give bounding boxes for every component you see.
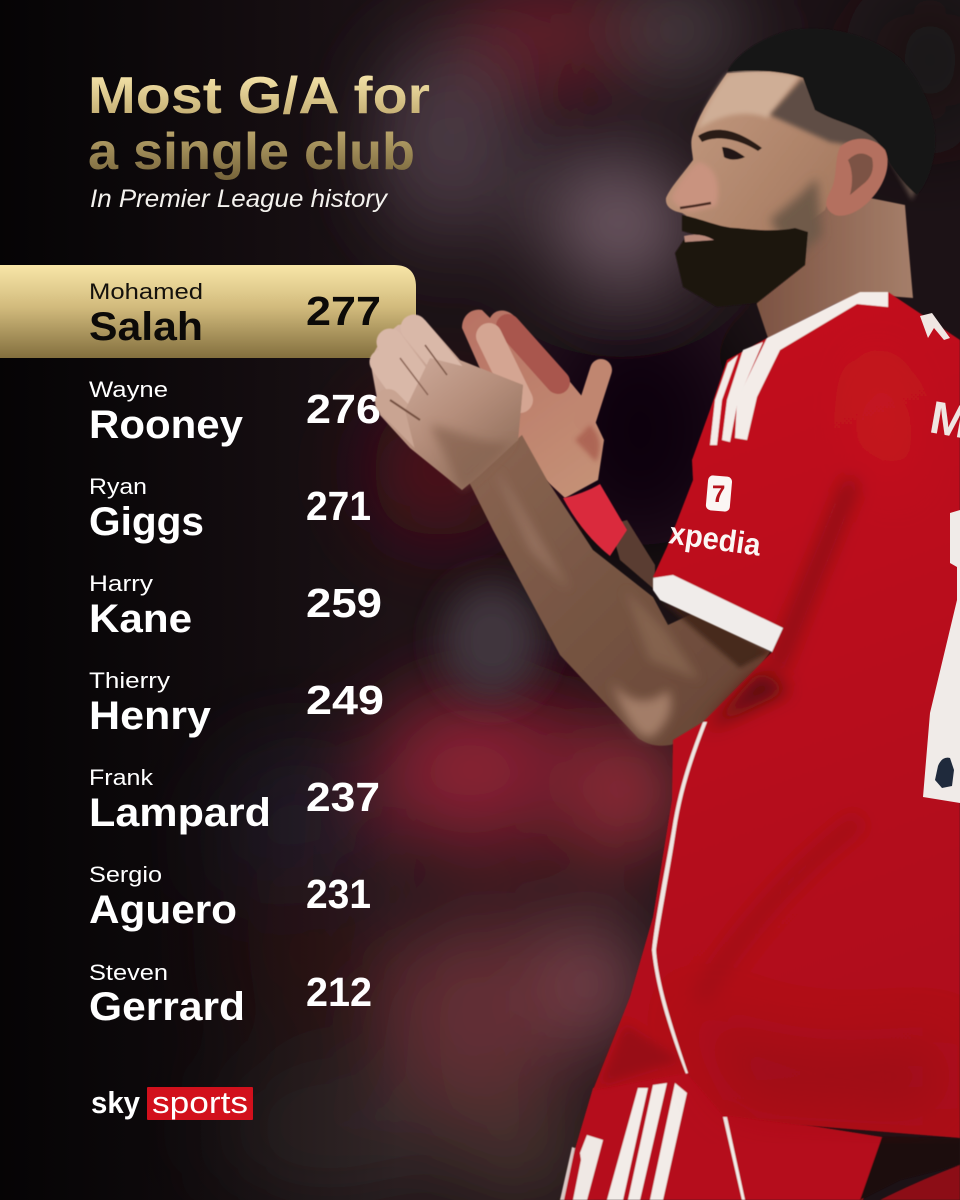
row: Gerrard: Steven [89, 960, 168, 985]
subtitle: In Premier League history [90, 185, 389, 213]
highlighted gold row: Salah: Mohamed [89, 279, 203, 304]
sponsor logo: 7 [712, 481, 725, 508]
row: Gerrard: Gerrard [89, 985, 245, 1029]
row: Giggs: Giggs [89, 500, 204, 544]
row: Lampard: Lampard [89, 791, 271, 835]
neck [750, 190, 913, 338]
near forearm [468, 435, 770, 746]
row: Aguero: 231 [306, 871, 371, 917]
title: Most G/A for [88, 67, 430, 125]
head [666, 28, 935, 307]
wristband [563, 484, 627, 556]
row: Rooney [89, 377, 381, 447]
row: Henry: 249 [306, 677, 384, 723]
row: Kane: Harry [89, 571, 153, 596]
eyebrow [698, 130, 762, 151]
row: Henry: Thierry [89, 668, 170, 693]
row: Lampard [89, 765, 380, 835]
highlighted gold row: Salah [0, 265, 416, 358]
row: Lampard: Frank [89, 765, 154, 790]
near hand [370, 320, 523, 490]
row: Aguero: Sergio [89, 862, 162, 887]
row: Aguero [89, 862, 371, 932]
shirt body and sleeve [593, 292, 960, 1138]
row: Giggs: 271 [306, 483, 371, 529]
sponsor logo: xpedia [667, 515, 764, 563]
title [88, 67, 430, 181]
sky sports logo: sky [91, 1085, 141, 1120]
player photo illustration [370, 28, 960, 1200]
shorts [560, 1070, 960, 1200]
row: Lampard: 237 [306, 774, 380, 820]
highlighted gold row: Salah: 277 [306, 288, 381, 334]
row: Kane: 259 [306, 580, 382, 626]
highlighted gold row: Salah: Salah [89, 305, 203, 349]
row: Giggs: Ryan [89, 474, 147, 499]
row: Gerrard: 212 [306, 969, 372, 1015]
row: Aguero: Aguero [89, 888, 237, 932]
row: Henry: Henry [89, 694, 212, 738]
row: Kane: Kane [89, 597, 192, 641]
title: a single club [88, 123, 415, 181]
row: Gerrard [89, 960, 372, 1029]
shirt folds [600, 350, 940, 1110]
far hand [462, 310, 604, 498]
ear [826, 139, 888, 216]
row: Henry [89, 668, 384, 738]
row: Rooney: Rooney [89, 403, 244, 447]
sky sports logo [91, 1085, 253, 1120]
row: Rooney: Wayne [89, 377, 168, 402]
sponsor logo [667, 475, 764, 563]
eye [722, 147, 745, 160]
row: Kane [89, 571, 382, 641]
sky sports logo: sports [152, 1085, 248, 1120]
shirt name and number [920, 313, 960, 803]
row: Rooney: 276 [306, 386, 381, 432]
row: Giggs [89, 474, 371, 544]
far forearm [610, 520, 655, 590]
